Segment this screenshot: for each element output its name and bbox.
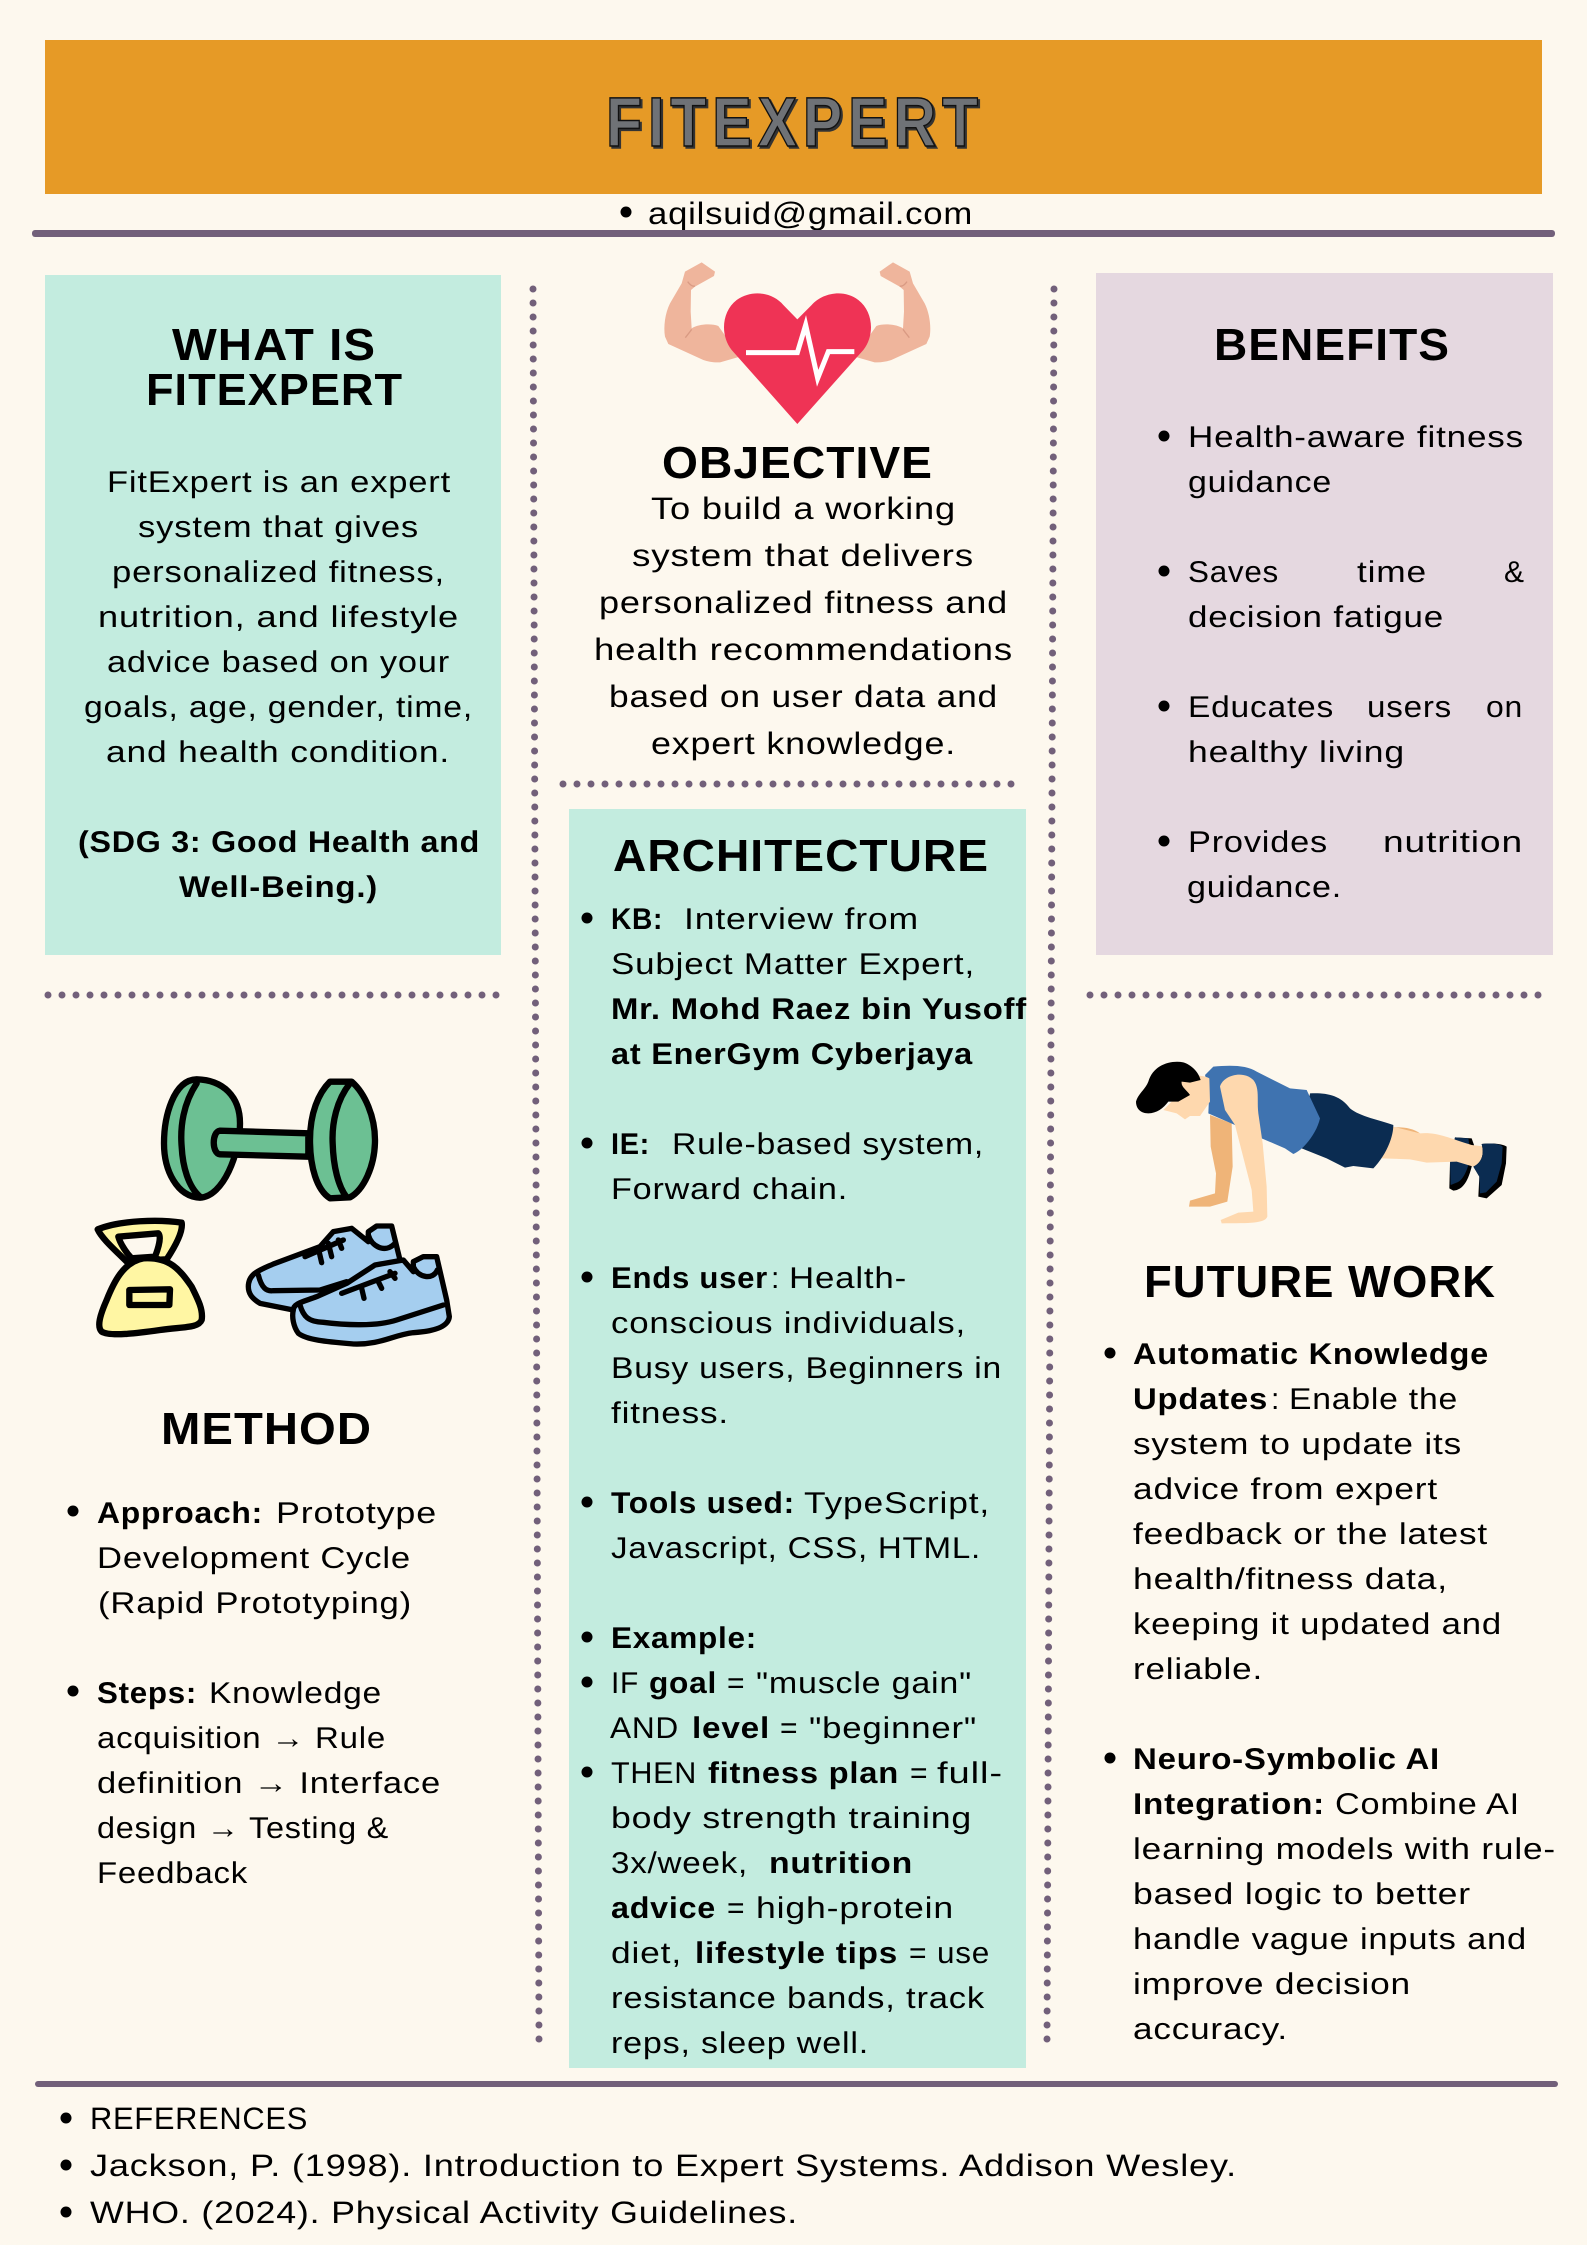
benefit: saves time: Saves bbox=[1188, 556, 1279, 589]
example rule: full- bbox=[937, 1757, 1003, 1790]
steps item: design → Testing & bbox=[97, 1812, 389, 1845]
neuro-symbolic ai item: Combine AI bbox=[1335, 1788, 1520, 1821]
knowledge base item: KB: bbox=[611, 903, 663, 936]
heading: what is fitexpert: WHAT IS bbox=[172, 319, 376, 370]
tools item: TypeScript, bbox=[804, 1487, 990, 1520]
heading: objective: OBJECTIVE bbox=[662, 437, 933, 488]
description text: system that gives bbox=[138, 511, 419, 544]
knowledge base item: Mr. Mohd Raez bin Yusoff bbox=[611, 993, 1027, 1026]
neuro-symbolic ai item: Neuro-Symbolic AI bbox=[1133, 1743, 1440, 1776]
references: REFERENCES bbox=[90, 2101, 308, 2136]
objective text bbox=[594, 491, 1013, 761]
automatic knowledge updates item: Automatic Knowledge bbox=[1133, 1338, 1489, 1371]
inference engine item: IE: bbox=[611, 1128, 650, 1161]
objective text: based on user data and bbox=[609, 679, 998, 714]
neuro-symbolic ai item: improve decision bbox=[1133, 1968, 1411, 2001]
example rule: high-protein bbox=[756, 1892, 954, 1925]
description text: FitExpert is an expert bbox=[107, 466, 451, 499]
steps item: Knowledge bbox=[209, 1677, 382, 1710]
icon: man doing push-up bbox=[1136, 1062, 1507, 1223]
approach item: Approach: bbox=[97, 1497, 263, 1530]
heading: method: METHOD bbox=[161, 1403, 372, 1454]
approach item: Development Cycle bbox=[97, 1542, 411, 1575]
example rule: 3x/week, bbox=[611, 1847, 748, 1880]
approach item: Prototype bbox=[276, 1497, 437, 1530]
example rule: level bbox=[692, 1712, 770, 1745]
neuro-symbolic ai item: based logic to better bbox=[1133, 1878, 1471, 1911]
description text: nutrition, and lifestyle bbox=[98, 601, 459, 634]
description text bbox=[84, 466, 473, 769]
example rule: goal bbox=[649, 1667, 717, 1700]
icon: kettlebell bbox=[98, 1221, 202, 1334]
example rule: AND bbox=[610, 1712, 679, 1745]
end users item: Busy users, Beginners in bbox=[611, 1352, 1002, 1385]
contact email: aqilsuid@gmail.com bbox=[648, 196, 973, 231]
example rule: advice bbox=[611, 1892, 716, 1925]
tools item bbox=[582, 1487, 990, 1565]
example rule: "beginner" bbox=[809, 1712, 977, 1745]
automatic knowledge updates item: reliable. bbox=[1133, 1653, 1263, 1686]
automatic knowledge updates item: Updates bbox=[1133, 1383, 1268, 1416]
example rule: resistance bands, track bbox=[611, 1982, 985, 2015]
benefit: nutrition guidance: Provides bbox=[1188, 826, 1328, 859]
example rule: = bbox=[727, 1667, 745, 1700]
heading: what is fitexpert: FITEXPERT bbox=[146, 364, 403, 415]
example rule: THEN bbox=[611, 1757, 697, 1790]
benefit: saves time: time bbox=[1357, 556, 1427, 589]
heart bbox=[724, 293, 871, 424]
objective text: system that delivers bbox=[632, 538, 974, 573]
sdg note: (SDG 3: Good Health and bbox=[78, 826, 480, 859]
panel: future work bbox=[1104, 1256, 1556, 2046]
objective text: To build a working bbox=[651, 491, 956, 526]
icon: dumbbell, kettlebell and shoes bbox=[98, 1079, 449, 1344]
panel: method bbox=[68, 1403, 441, 1890]
heading: architecture: ARCHITECTURE bbox=[613, 830, 989, 881]
benefit: educates users: Educates bbox=[1188, 691, 1334, 724]
example rule: diet, bbox=[611, 1937, 682, 1970]
end users item: fitness. bbox=[611, 1397, 729, 1430]
benefit: saves time bbox=[1158, 556, 1525, 634]
heading: benefits: BENEFITS bbox=[1214, 319, 1450, 370]
inference engine item: Rule-based system, bbox=[672, 1128, 984, 1161]
benefit: health-aware guidance: Health-aware fitness bbox=[1188, 421, 1524, 454]
benefit: nutrition guidance: guidance. bbox=[1187, 871, 1342, 904]
description text: advice based on your bbox=[107, 646, 450, 679]
objective text: health recommendations bbox=[594, 632, 1013, 667]
automatic knowledge updates item: feedback or the latest bbox=[1133, 1518, 1488, 1551]
knowledge base item: Subject Matter Expert, bbox=[611, 948, 975, 981]
automatic knowledge updates item: Enable the bbox=[1289, 1383, 1458, 1416]
automatic knowledge updates item: advice from expert bbox=[1133, 1473, 1438, 1506]
panel: objective bbox=[594, 437, 1013, 761]
benefit: health-aware guidance: guidance bbox=[1188, 466, 1332, 499]
references: WHO. (2024). Physical Activity Guidelines. bbox=[90, 2195, 798, 2230]
tools item: Javascript, CSS, HTML. bbox=[611, 1532, 981, 1565]
steps item bbox=[68, 1677, 441, 1890]
references bbox=[60, 2101, 1237, 2230]
automatic knowledge updates item: keeping it updated and bbox=[1133, 1608, 1502, 1641]
neuro-symbolic ai item: learning models with rule- bbox=[1133, 1833, 1556, 1866]
example rule: "muscle gain" bbox=[756, 1667, 972, 1700]
steps item: definition → Interface bbox=[97, 1767, 441, 1800]
icon: dumbbell bbox=[164, 1079, 375, 1198]
heading: future work: FUTURE WORK bbox=[1144, 1256, 1496, 1307]
neuro-symbolic ai item: accuracy. bbox=[1133, 2013, 1288, 2046]
benefit: saves time: decision fatigue bbox=[1188, 601, 1444, 634]
arms bbox=[664, 262, 930, 362]
neuro-symbolic ai item: Integration: bbox=[1133, 1788, 1325, 1821]
title: FITEXPERT bbox=[606, 83, 984, 161]
inference engine item bbox=[582, 1128, 984, 1206]
steps item: acquisition → Rule bbox=[97, 1722, 386, 1755]
knowledge base item bbox=[582, 903, 1027, 1071]
objective text: personalized fitness and bbox=[599, 585, 1008, 620]
header banner bbox=[45, 40, 1542, 194]
end users item: : bbox=[771, 1262, 780, 1295]
automatic knowledge updates item bbox=[1104, 1338, 1502, 1686]
example rule: = bbox=[909, 1937, 927, 1970]
icon: shoes bbox=[248, 1226, 449, 1344]
panel: what is fitexpert bbox=[45, 275, 501, 955]
knowledge base item: at EnerGym Cyberjaya bbox=[611, 1038, 973, 1071]
end users item: Ends user bbox=[611, 1262, 768, 1295]
example rule: = bbox=[910, 1757, 928, 1790]
panel: architecture bbox=[569, 809, 1027, 2068]
approach item bbox=[68, 1497, 437, 1620]
benefit: educates users: on bbox=[1486, 691, 1523, 724]
benefit: educates users: users bbox=[1367, 691, 1452, 724]
example rule: Example: bbox=[611, 1622, 757, 1655]
description text: goals, age, gender, time, bbox=[84, 691, 473, 724]
example rule: IF bbox=[611, 1667, 639, 1700]
neuro-symbolic ai item bbox=[1104, 1743, 1556, 2046]
approach item: (Rapid Prototyping) bbox=[98, 1587, 412, 1620]
end users item: Health- bbox=[789, 1262, 907, 1295]
automatic knowledge updates item: health/fitness data, bbox=[1133, 1563, 1448, 1596]
benefit: nutrition guidance bbox=[1158, 826, 1523, 904]
example rule: = bbox=[727, 1892, 745, 1925]
sdg note: Well-Being.) bbox=[179, 871, 378, 904]
panel: benefits bbox=[1096, 273, 1553, 955]
description text: personalized fitness, bbox=[112, 556, 445, 589]
example rule: use bbox=[937, 1937, 990, 1970]
benefit: educates users bbox=[1158, 691, 1523, 769]
steps item: Steps: bbox=[97, 1677, 197, 1710]
benefit: educates users: healthy living bbox=[1188, 736, 1405, 769]
automatic knowledge updates item: : bbox=[1271, 1383, 1280, 1416]
knowledge base item: Interview from bbox=[684, 903, 919, 936]
end users item: conscious individuals, bbox=[611, 1307, 966, 1340]
description text: and health condition. bbox=[106, 736, 450, 769]
neuro-symbolic ai item: handle vague inputs and bbox=[1133, 1923, 1527, 1956]
sdg note bbox=[78, 826, 480, 904]
heading: what is fitexpert bbox=[146, 319, 403, 415]
objective text: expert knowledge. bbox=[651, 726, 956, 761]
icon: heart with flexing arms bbox=[664, 262, 930, 424]
end users item bbox=[582, 1262, 1002, 1430]
references: Jackson, P. (1998). Introduction to Expert Systems. Addison Wesley. bbox=[90, 2148, 1237, 2183]
example rule: reps, sleep well. bbox=[611, 2027, 869, 2060]
benefit: nutrition guidance: nutrition bbox=[1383, 826, 1523, 859]
example rule: body strength training bbox=[611, 1802, 972, 1835]
tools item: Tools used: bbox=[611, 1487, 795, 1520]
example rule bbox=[582, 1622, 1003, 2060]
example rule: = bbox=[780, 1712, 798, 1745]
automatic knowledge updates item: system to update its bbox=[1133, 1428, 1462, 1461]
example rule: nutrition bbox=[769, 1847, 913, 1880]
example rule: fitness plan bbox=[708, 1757, 899, 1790]
benefit: health-aware guidance bbox=[1158, 421, 1524, 499]
pulse line bbox=[746, 325, 854, 378]
steps item: Feedback bbox=[97, 1857, 248, 1890]
benefit: saves time: & bbox=[1504, 556, 1525, 589]
inference engine item: Forward chain. bbox=[611, 1173, 848, 1206]
example rule: lifestyle tips bbox=[695, 1937, 898, 1970]
